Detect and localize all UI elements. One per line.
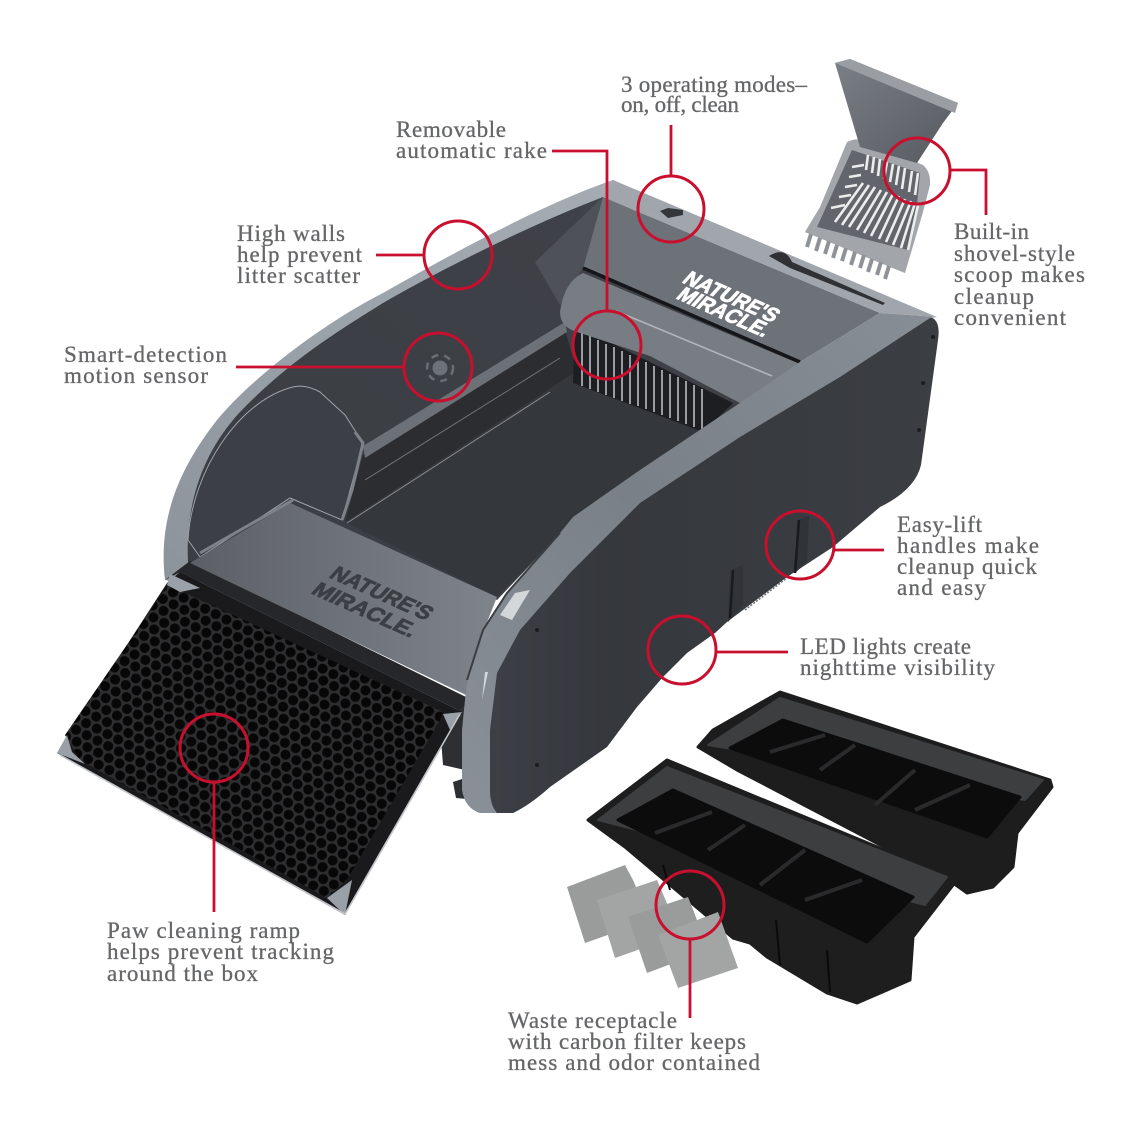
litter box product (164, 180, 939, 813)
scoop teeth (807, 234, 889, 279)
callout: scoop: cleanup (954, 284, 1034, 309)
waste receptacle rear (698, 692, 1052, 893)
callout: operating modes: 3 operating modes– (621, 72, 808, 97)
rake tines (582, 332, 702, 429)
paw cleaning ramp (57, 572, 462, 915)
scoop slots (831, 155, 918, 250)
rake bar (560, 273, 800, 403)
ramp hex mesh (65, 585, 443, 898)
callout: handles: cleanup quick (897, 554, 1038, 579)
rear corner wall (535, 197, 603, 305)
waste receptacle front (588, 760, 957, 1003)
scoop body (805, 139, 930, 273)
callout: motion sensor: Smart-detection (64, 342, 228, 367)
callout: paw ramp: helps prevent tracking (107, 939, 334, 964)
logo on front step: MIRACLE. (307, 579, 424, 642)
rear top strip (603, 180, 937, 317)
right rim (462, 313, 937, 813)
foot behind ramp (440, 705, 478, 800)
callout: waste receptacle: Waste receptacle (508, 1008, 677, 1033)
callout: handles: and easy (897, 575, 986, 600)
callout: high walls (237, 221, 492, 289)
callout: high walls: High walls (237, 221, 345, 246)
interior walls (188, 197, 800, 600)
callout: motion sensor (64, 333, 472, 401)
ramp corners (57, 574, 462, 915)
mode switch (650, 204, 683, 218)
carbon filters (567, 865, 738, 988)
callout: automatic rake (396, 117, 641, 379)
right outer body (462, 317, 939, 813)
scoop handle (835, 59, 958, 163)
scoop (805, 59, 958, 279)
door panel (188, 386, 363, 557)
callout: LED lights: LED lights create (800, 634, 971, 659)
rim inner channel (467, 533, 560, 680)
callout: scoop: scoop makes (954, 262, 1085, 287)
callout: handles: Easy-lift (897, 512, 983, 537)
motion sensor (427, 355, 453, 381)
callout: motion sensor: motion sensor (64, 363, 208, 388)
interior floor (345, 372, 735, 597)
scoop front band (805, 227, 908, 273)
callout: paw ramp: around the box (107, 961, 258, 986)
callout: LED lights: nighttime visibility (800, 655, 996, 680)
callout: waste receptacle: with carbon filter keeps (508, 1029, 746, 1054)
callout: paw ramp (107, 714, 334, 986)
callout: automatic rake: automatic rake (396, 138, 547, 163)
rear notch (769, 252, 885, 305)
callout: automatic rake: Removable (396, 117, 506, 142)
logo on rear panel: NATURE'S (678, 268, 785, 326)
gap line (583, 268, 800, 362)
callout: LED lights (648, 616, 996, 684)
door frame bracket (342, 432, 363, 520)
callout: scoop: shovel-style (954, 241, 1075, 266)
side ledge (363, 322, 567, 458)
LED strip (745, 578, 787, 610)
logo on rear panel: MIRACLE. (672, 284, 777, 341)
body screws (537, 337, 933, 765)
callout: scoop (884, 138, 1085, 330)
callout: handles: handles make (897, 533, 1039, 558)
callout: operating modes (621, 72, 808, 242)
callout: waste receptacle (508, 871, 760, 1075)
front entry step (190, 503, 497, 695)
callout: handles (766, 511, 1039, 600)
callout: high walls: litter scatter (237, 263, 360, 288)
callout: operating modes: on, off, clean (621, 92, 740, 117)
callout: scoop: convenient (954, 305, 1067, 330)
rim highlight (482, 590, 530, 700)
callout: waste receptacle: mess and odor contained (508, 1050, 760, 1075)
rear panel (583, 197, 880, 362)
ramp hinge strip (165, 561, 468, 712)
left rim (164, 180, 640, 585)
callout: scoop: Built-in (954, 219, 1030, 244)
logo on front step (307, 563, 439, 642)
under-ledge channel (345, 330, 578, 522)
logo on front step: NATURE'S (325, 563, 439, 624)
callout: high walls: help prevent (237, 242, 363, 267)
callout: paw ramp: Paw cleaning ramp (107, 918, 300, 943)
rake tines backing (573, 325, 733, 432)
handle slots (728, 516, 809, 622)
